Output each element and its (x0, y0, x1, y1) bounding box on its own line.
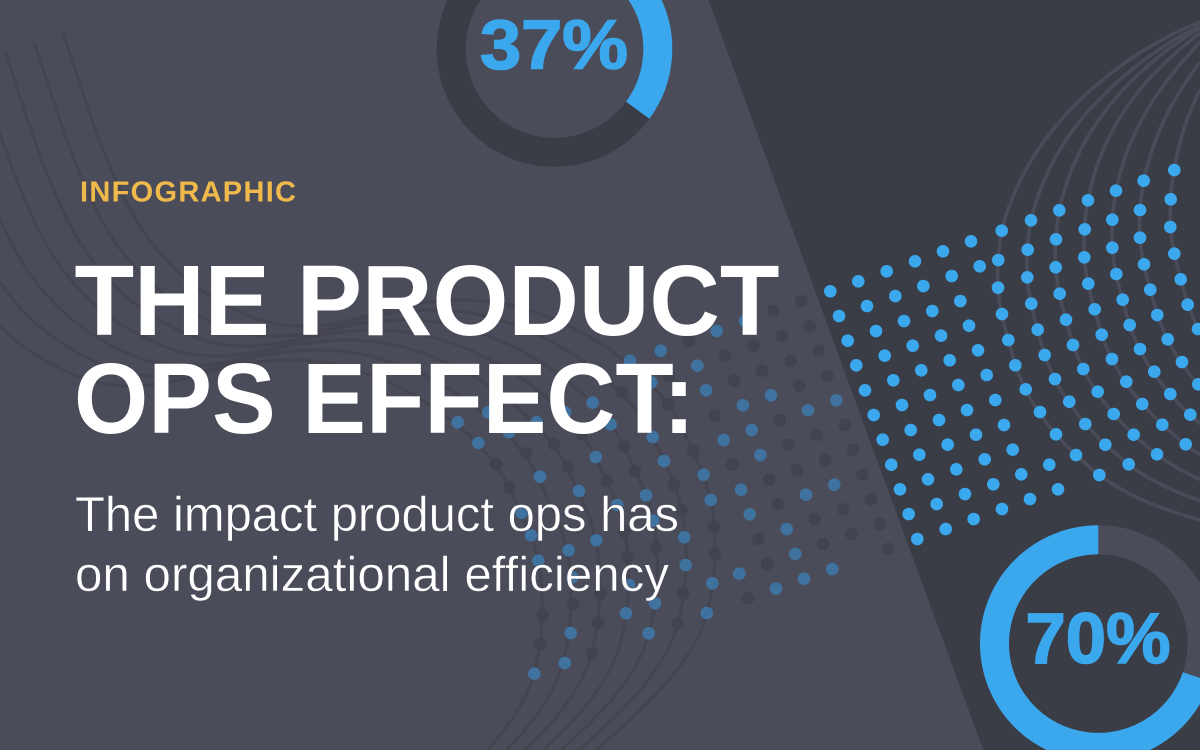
donut track (995, 540, 1200, 747)
donut value arc (554, 0, 658, 110)
title line 1: THE PRODUCT (74, 245, 780, 357)
dot field: bright blue dots on dark panel (830, 170, 1198, 539)
donut label: 70% (1026, 600, 1170, 679)
subtitle (75, 488, 679, 602)
subtitle line 1: The impact product ops has (75, 488, 679, 542)
dark diagonal panel (708, 0, 1200, 750)
subtitle line 2: on organizational efficiency (75, 548, 670, 602)
title (74, 245, 780, 455)
wave lines: left background (0, 32, 715, 750)
eyebrow label: INFOGRAPHIC (80, 177, 296, 209)
dot field: dark dots behind title (496, 301, 888, 653)
wave lines: right panel upper sweep (1002, 22, 1200, 231)
donut label: 37% (480, 6, 628, 84)
title line 2: OPS EFFECT: (74, 343, 695, 455)
dot field: muted blue dots behind title (458, 321, 836, 674)
donut chart: 70% (994, 540, 1200, 747)
donut chart: 37% (451, 0, 658, 152)
donut track (451, 0, 658, 152)
donut value arc (994, 540, 1197, 747)
wave lines: right panel lower sweep (998, 170, 1200, 520)
